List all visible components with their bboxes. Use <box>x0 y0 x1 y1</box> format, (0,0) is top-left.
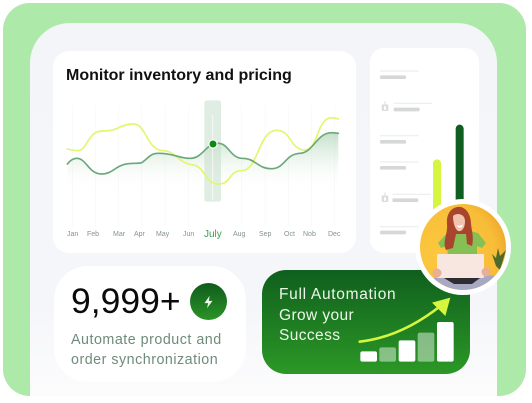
bar: lime <box>433 159 441 223</box>
stat description: Automate product and <box>71 332 222 348</box>
growth chart with arrow <box>358 298 454 362</box>
month axis labels: Apr <box>134 231 145 238</box>
month axis labels: Nob <box>303 231 316 238</box>
hands <box>432 268 442 278</box>
bar: dark green <box>456 125 464 221</box>
stat description: order synchronization <box>71 352 218 368</box>
laptop <box>437 254 484 278</box>
area fill <box>67 133 338 193</box>
icon: alert 2 <box>382 193 388 202</box>
month axis labels: Jun <box>183 231 194 238</box>
heading: monitor inventory and pricing: Monitor inventory and pricing <box>66 67 292 84</box>
shirt <box>438 231 486 256</box>
month axis labels: July <box>204 229 222 240</box>
panel: inventory chart <box>53 51 356 253</box>
automation text: Full Automation <box>279 286 396 303</box>
yellow price line <box>67 118 338 184</box>
face <box>453 214 465 231</box>
month axis labels: Aug <box>233 231 245 238</box>
growth text: Grow your <box>279 307 354 324</box>
month axis labels: Jan <box>67 231 78 238</box>
panel: full automation <box>262 270 470 374</box>
icon: lightning badge <box>190 283 227 320</box>
July marker <box>208 139 218 149</box>
highlight band: July <box>204 100 221 202</box>
month axis labels: Oct <box>284 231 295 238</box>
month axis labels: Sep <box>259 231 271 238</box>
stat description <box>71 332 222 368</box>
panel: 9,999+ stat <box>54 266 246 382</box>
icon: alert 1 <box>382 102 388 111</box>
growth text: Success <box>279 326 340 344</box>
month axis labels: May <box>156 231 169 238</box>
side list placeholders <box>380 70 464 234</box>
month axis labels: Dec <box>328 231 340 238</box>
growth text <box>279 307 354 344</box>
stat number: 9,999+ <box>71 281 181 321</box>
legs <box>434 276 495 290</box>
avatar: woman with laptop <box>415 199 511 295</box>
plant <box>492 248 506 270</box>
panel: side list <box>370 48 479 253</box>
hair <box>445 207 473 250</box>
month axis labels: Mar <box>113 231 125 238</box>
month axis labels <box>67 229 340 240</box>
green inventory line <box>67 133 338 174</box>
month axis labels: Feb <box>87 231 99 238</box>
line chart <box>66 100 340 226</box>
